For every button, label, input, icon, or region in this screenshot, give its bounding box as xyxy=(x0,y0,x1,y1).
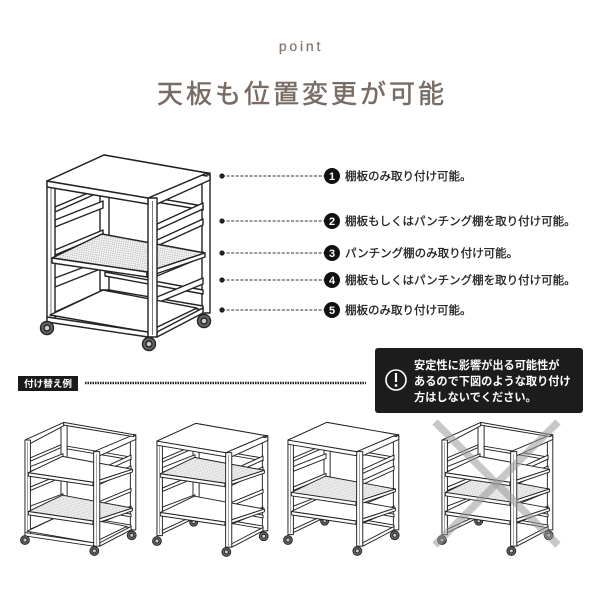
callout 3 xyxy=(219,245,518,261)
callout 4 xyxy=(219,272,576,288)
icon: exclamation xyxy=(386,370,406,390)
warning box: 安定性に影響が出る可能性が xyxy=(414,358,559,372)
callout 5: 棚板のみ取り付け可能。 xyxy=(345,303,472,317)
example cart 3 xyxy=(284,422,399,555)
callout 4: 棚板もしくはパンチング棚を取り付け可能。 xyxy=(345,273,576,287)
callout 3: 3 xyxy=(329,248,335,260)
callout 3: パンチング棚のみ取り付け可能。 xyxy=(345,246,518,260)
callout 1: 棚板のみ取り付け可能。 xyxy=(345,169,472,183)
tag: replacement examples: 付け替え例 xyxy=(24,378,72,390)
example cart 2 xyxy=(153,423,268,556)
callout 5: 5 xyxy=(329,305,335,317)
callout 2: 棚板もしくはパンチング棚を取り付け可能。 xyxy=(345,214,576,228)
main cart illustration xyxy=(40,155,210,350)
cross mark xyxy=(435,422,558,545)
dotted connector xyxy=(85,382,366,384)
callout 2 xyxy=(219,213,576,229)
callout 1: 1 xyxy=(329,171,335,183)
callout 4: 4 xyxy=(329,275,336,287)
callout 1 xyxy=(219,168,472,184)
callout 2: 2 xyxy=(329,216,335,228)
warning box: あるので下図のような取り付け xyxy=(414,374,571,388)
warning box: 方はしないでください。 xyxy=(414,390,537,404)
example cart 4: not allowed xyxy=(438,422,553,555)
callout 5 xyxy=(219,302,472,318)
label: point: point xyxy=(279,38,323,54)
title: 天板も位置変更が可能 xyxy=(157,79,447,109)
tag: replacement examples xyxy=(18,376,78,391)
warning box xyxy=(375,348,583,413)
example cart 1 xyxy=(21,422,136,555)
